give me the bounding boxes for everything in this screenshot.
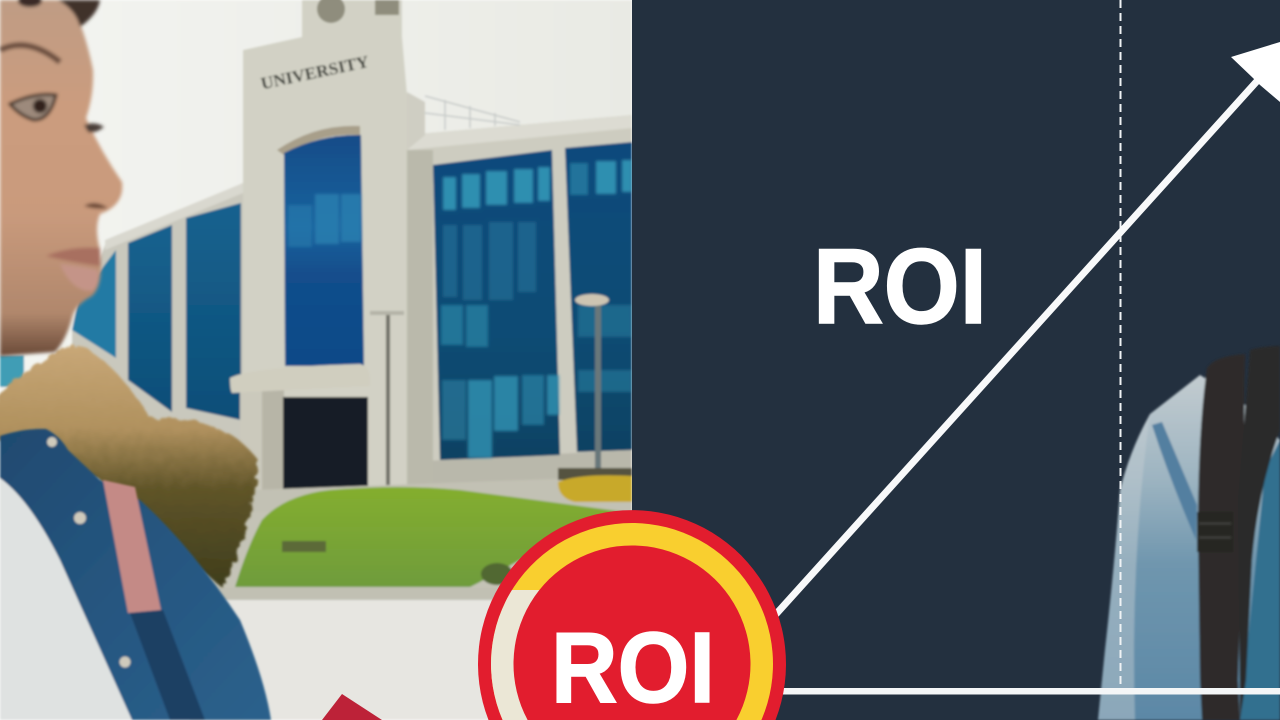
strap buckle [1197, 512, 1233, 552]
red book [322, 694, 382, 720]
dark pocket [130, 610, 205, 720]
hair curls [58, 0, 100, 27]
bush [0, 343, 258, 587]
dashed vertical line [1120, 0, 1122, 688]
tower side [407, 92, 425, 150]
sky [0, 0, 632, 520]
hedge shadow [558, 468, 632, 480]
walkway [250, 476, 632, 512]
badge inner disc [514, 545, 750, 720]
right window two panes [570, 160, 632, 392]
lawn [235, 487, 625, 587]
roof railing [425, 96, 520, 130]
pink strap [103, 480, 161, 613]
near iris [33, 99, 47, 113]
woman: face [0, 0, 122, 356]
tower top [302, 0, 402, 42]
backpack strap one [1198, 354, 1245, 720]
upper lip [46, 248, 100, 266]
lower plinth [407, 450, 632, 490]
building: university [72, 0, 632, 490]
panel: university photo [0, 0, 632, 720]
jacket right side [1240, 440, 1280, 720]
entrance posts [240, 390, 262, 490]
tower body [243, 37, 413, 490]
jacket folds [1152, 422, 1197, 540]
ground [190, 484, 632, 720]
x axis [770, 688, 1280, 694]
badge cream segment [491, 590, 540, 720]
right wing wall [407, 115, 632, 485]
hair left [18, 0, 42, 7]
left windows [186, 203, 241, 420]
right window one panes [441, 167, 559, 458]
denim jacket [0, 429, 271, 720]
backpack strap two [1238, 346, 1280, 720]
lamp post left [386, 315, 390, 487]
growth arrow [768, 42, 1280, 623]
nostril [84, 203, 108, 209]
left wing cornice [105, 183, 243, 250]
hedge [558, 475, 632, 502]
far eye lashes [84, 123, 104, 132]
badge: ROI [478, 510, 786, 720]
teal reflection [0, 355, 24, 387]
eyebrow [0, 45, 60, 62]
entrance canopy [230, 364, 370, 393]
student with backpack [1098, 346, 1280, 720]
white body [0, 478, 132, 720]
centre window panes [288, 194, 361, 247]
centre window arch [277, 126, 360, 155]
badge yellow ring [491, 523, 773, 720]
jacket light edge [1098, 414, 1150, 720]
entrance door [283, 397, 368, 490]
curb [190, 588, 540, 600]
near eye [10, 94, 56, 120]
lamp post right [595, 302, 601, 482]
badge outer ring [478, 510, 786, 720]
lawn patch [282, 541, 326, 552]
lower lip [60, 264, 98, 291]
arrow shaft [768, 80, 1258, 623]
woman: white shirt and jacket [0, 429, 271, 720]
right window two [565, 142, 632, 452]
road [190, 600, 632, 720]
student jacket [1098, 375, 1280, 720]
left wing wall [72, 183, 250, 490]
right window one [433, 150, 560, 460]
arrow head [1231, 42, 1280, 102]
right wing cornice [407, 115, 632, 150]
tower ornament [375, 0, 399, 15]
centre window [284, 135, 364, 366]
jacket snaps [74, 512, 86, 524]
heading: ROI: ROI [813, 226, 987, 346]
tower emblem [317, 0, 345, 23]
panel: navy chart background [632, 0, 1280, 720]
university sign: UNIVERSITY [259, 52, 371, 93]
small shrub [481, 563, 513, 585]
